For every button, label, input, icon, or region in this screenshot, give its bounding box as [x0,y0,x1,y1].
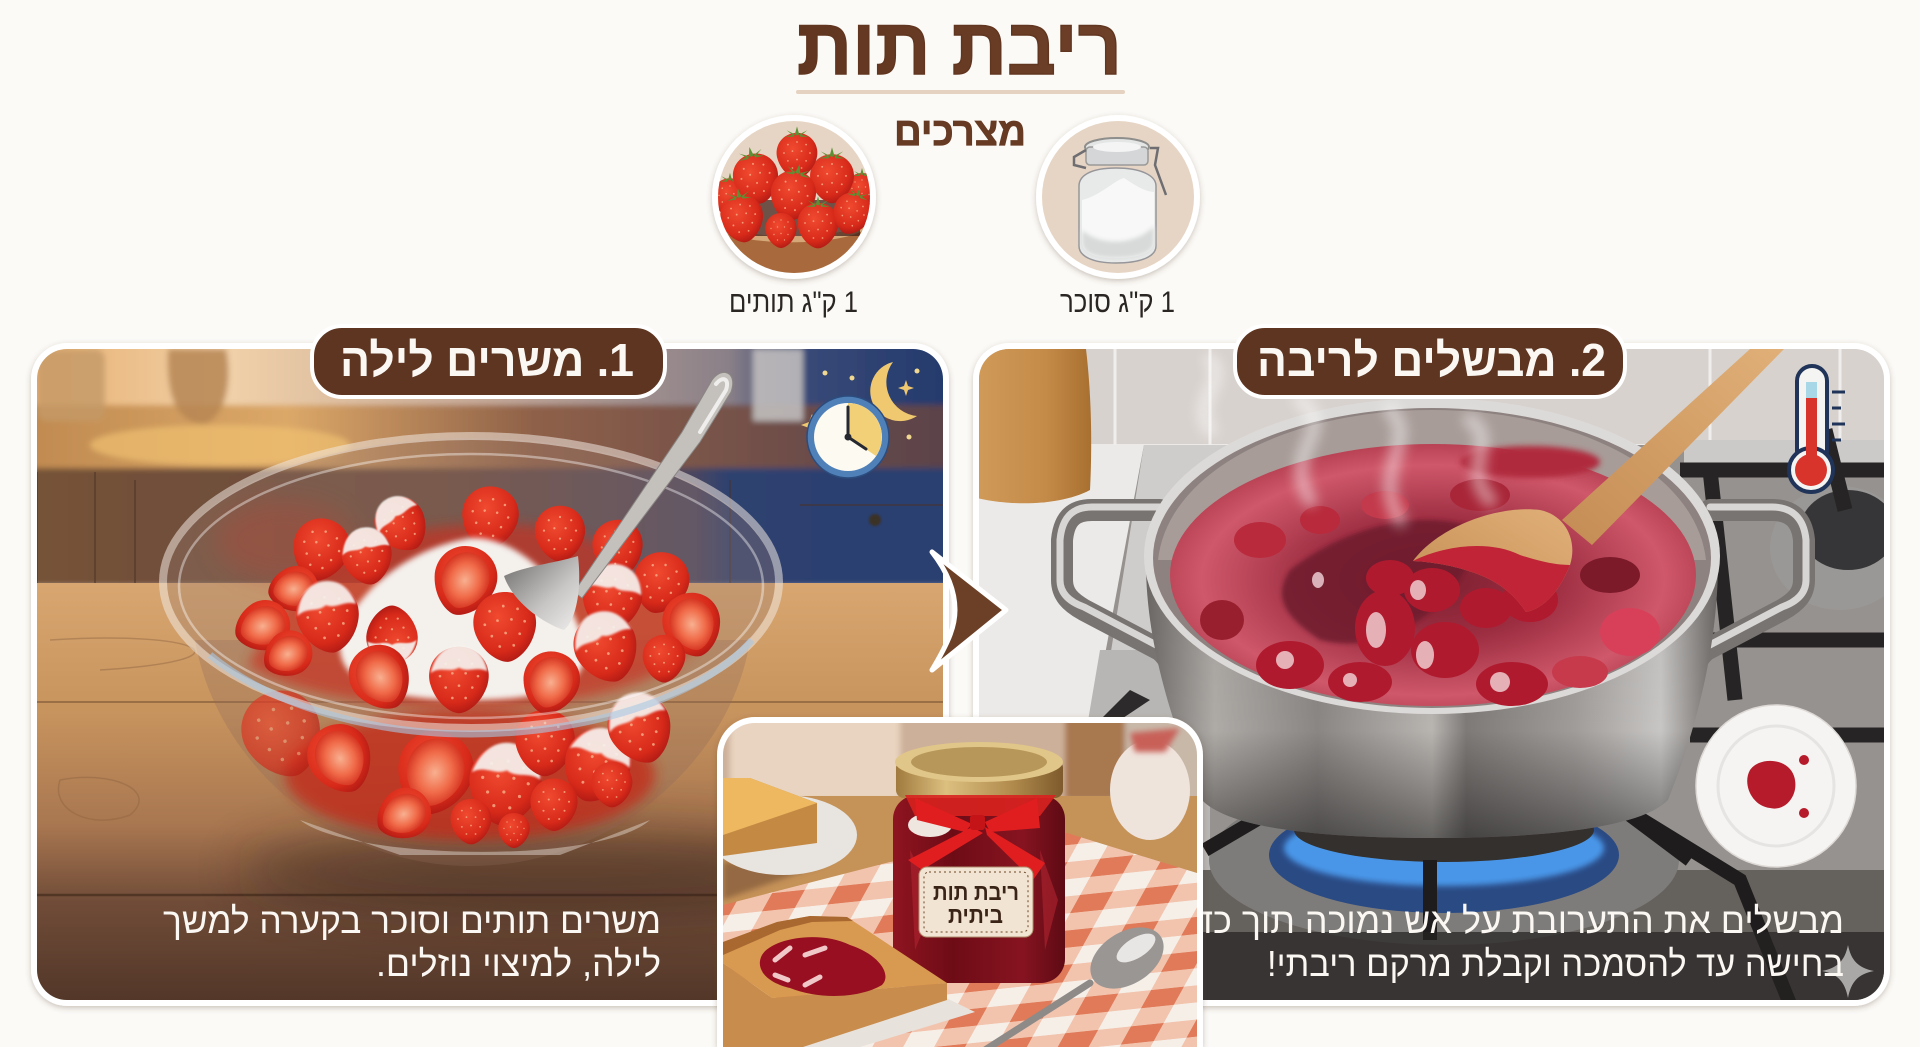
heading: ingredients: מצרכים [894,110,1026,154]
step 2 description: מבשלים את התערובת על אש נמוכה תוך כדי [1184,900,1844,941]
bubbling jam chunks [1200,479,1660,706]
text band [1190,932,1890,1004]
icon: sparkle [1822,945,1874,998]
kitchen wall, counter and wooden utensil jar [979,349,1884,717]
step 1 badge [312,326,665,397]
step 2 description: בחישה עד להסמכה וקבלת מרקם ריבתי! [1267,943,1844,984]
step 1 badge: 1. משרים לילה [340,334,634,386]
step 2 description [1184,900,1844,984]
panel: step 2 cooking [973,343,1910,1006]
icon: clock and moon [801,362,920,478]
step 1 description: לילה, למיצוי נוזלים. [376,943,661,984]
ingredient: strawberries bowl [712,115,878,279]
pot handles [1060,507,1806,682]
label: sugar quantity: 1 ק"ג סוכר [1060,286,1175,319]
ingredient: sugar jar [1036,115,1200,279]
wooden spoon [1413,349,1784,612]
breakfast table background [715,715,1205,1047]
panel: finished jam jar [709,715,1205,1047]
jam jar with bow and label [893,742,1065,983]
wooden table [37,583,943,1003]
plate with toast and jug [709,728,1190,875]
step 2 badge: 2. מבשלים לריבה [1257,334,1606,386]
step 2 badge [1235,326,1625,397]
icon: thermometer [1789,366,1845,492]
jar label text: ריבת תות [933,879,1019,905]
glass bowl with strawberries [163,436,779,866]
panel: step 1 overnight maceration [30,340,950,1006]
jam jar with bow and label: ביתית [948,902,1003,928]
kitchen background [30,340,950,586]
teaspoon [983,927,1164,1047]
title: ריבת תות [797,2,1122,91]
icon: test plate with jam drop [1696,705,1856,867]
spoon [504,372,733,630]
label: strawberries quantity: 1 ק"ג תותים [729,286,858,319]
steel pot [1144,398,1720,838]
gas stove [1040,430,1910,1004]
arrow: step 1 to step 2 [932,552,1006,670]
toast with jam [723,916,975,1047]
steam [1204,360,1490,520]
step 1 description [163,900,661,984]
step 1 description: משרים תותים וסוכר בקערה למשך [163,900,661,941]
